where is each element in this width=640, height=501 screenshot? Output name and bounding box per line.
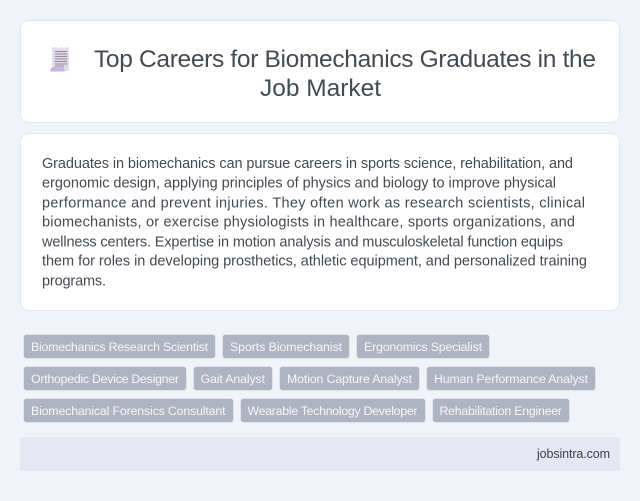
tag: Wearable Technology Developer: Wearable Technology Developer: [248, 404, 418, 418]
tag: Motion Capture Analyst: [280, 366, 420, 390]
icon: paper receipt scroll: [50, 47, 69, 72]
title: Job Market: [260, 75, 381, 102]
text block: description: [41, 156, 587, 290]
tag: Ergonomics Specialist: Ergonomics Specialist: [364, 340, 483, 354]
tag: Orthopedic Device Designer: [24, 366, 186, 390]
text block: description: Graduates in biomechanics can pursue careers in sports science, rehabilitation, and: [42, 156, 573, 172]
tag: Rehabilitation Engineer: [432, 398, 570, 422]
tag: Human Performance Analyst: [426, 366, 596, 390]
text block: description: biomechanists, or exercise physiologists in healthcare, sports organizations, and: [42, 214, 575, 230]
tag: Sports Biomechanist: [222, 334, 350, 358]
title: [94, 46, 596, 102]
tag: Motion Capture Analyst: Motion Capture Analyst: [287, 372, 413, 386]
text block: description: performance and prevent injuries. They often work as research scientists, clinical: [42, 196, 585, 212]
panel: header card: [20, 20, 620, 122]
text block: description: wellness centers. Expertise in motion analysis and musculoskeletal function equips: [41, 234, 563, 250]
tag: Gait Analyst: Gait Analyst: [200, 372, 266, 386]
tag: Human Performance Analyst: Human Performance Analyst: [434, 372, 589, 386]
tag: Biomechanical Forensics Consultant: Biomechanical Forensics Consultant: [31, 404, 226, 418]
tag: Biomechanical Forensics Consultant: [24, 398, 234, 422]
text block: description: ergonomic design, applying principles of physics and biology to improve physical: [42, 176, 556, 192]
tag: Biomechanics Research Scientist: Biomechanics Research Scientist: [31, 340, 209, 354]
panel: description card: [20, 134, 620, 310]
tag: Wearable Technology Developer: [240, 398, 426, 422]
tag list: careers: [24, 334, 596, 422]
text block: description: programs.: [42, 274, 106, 290]
tag: Rehabilitation Engineer: Rehabilitation Engineer: [440, 404, 562, 418]
text block: description: them for roles in developing prosthetics, athletic equipment, and personalized training: [42, 254, 587, 270]
tag: Gait Analyst: [194, 366, 272, 390]
tag: Ergonomics Specialist: [356, 334, 490, 358]
tag: Orthopedic Device Designer: Orthopedic Device Designer: [31, 372, 179, 386]
tag: Sports Biomechanist: Sports Biomechanist: [230, 340, 343, 354]
footer bar: [20, 437, 620, 471]
title: Top Careers for Biomechanics Graduates in the: [94, 46, 596, 73]
tag: Biomechanics Research Scientist: [24, 334, 216, 358]
footer text: site name: jobsintra.com: [536, 447, 610, 461]
